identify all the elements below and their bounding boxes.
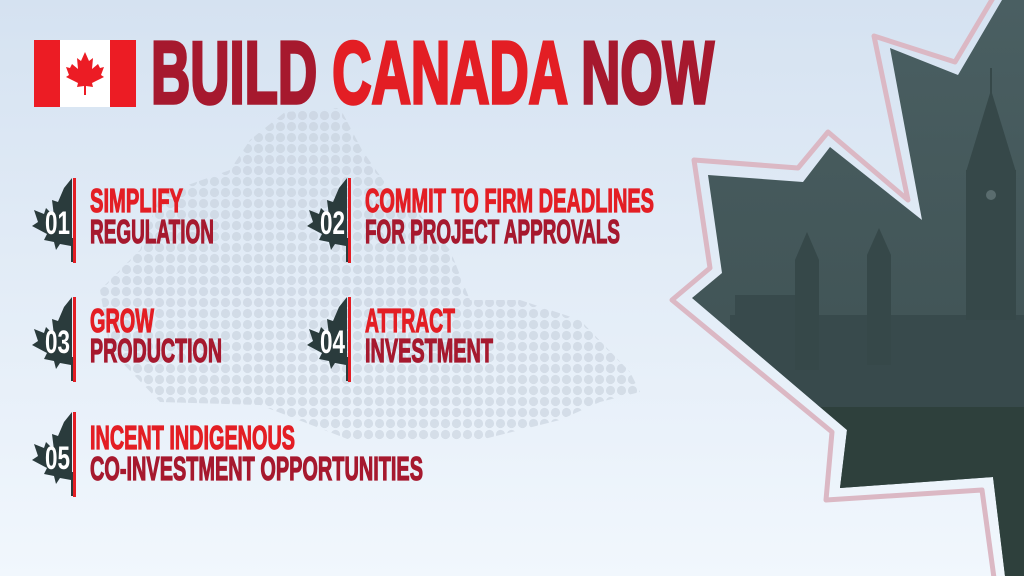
item 04: ATTRACT [365, 302, 455, 339]
item 01: SIMPLIFY [90, 182, 183, 219]
item 05: 05 [45, 440, 70, 476]
item 05: INCENT INDIGENOUS [90, 419, 295, 456]
item 03 [32, 297, 222, 382]
flag [34, 40, 136, 107]
item 02: COMMIT TO FIRM DEADLINES [365, 182, 654, 219]
item 03: PRODUCTION [90, 332, 222, 369]
item 05: CO-INVESTMENT OPPORTUNITIES [90, 450, 423, 487]
dotted map of Canada [100, 108, 640, 440]
maple leaf photo: parliament [690, 0, 1024, 576]
item 03: 03 [45, 324, 70, 360]
item 01: REGULATION [90, 213, 214, 250]
item 04 [307, 297, 493, 382]
item 01 [32, 178, 214, 263]
item 02 [307, 178, 654, 263]
item 03: GROW [90, 302, 155, 339]
item 01: 01 [45, 205, 70, 241]
leaf outline [672, 0, 994, 576]
title: BUILD CANADA NOW [151, 23, 714, 122]
item 02: FOR PROJECT APPROVALS [365, 213, 620, 250]
item 02: 02 [320, 205, 345, 241]
item 05 [32, 412, 423, 497]
item 04: INVESTMENT [365, 332, 493, 369]
item 04: 04 [320, 324, 345, 360]
